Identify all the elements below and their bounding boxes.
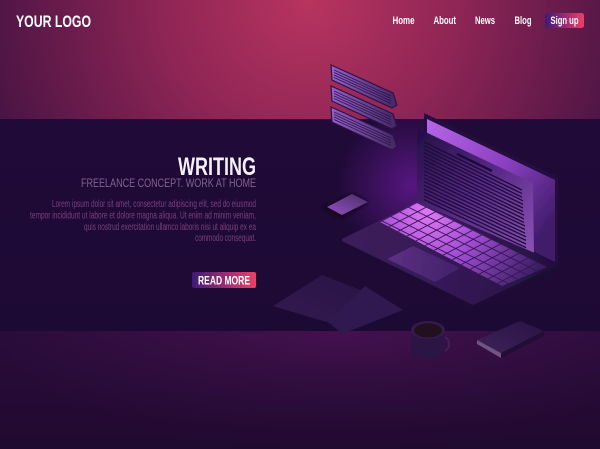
subheading: FREELANCE CONCEPT. WORK AT HOME (81, 176, 256, 190)
bubble 3 (331, 107, 397, 150)
middle background band (0, 119, 600, 331)
sign up button (545, 13, 584, 28)
laptop (342, 113, 558, 307)
bottom table band (0, 331, 600, 449)
sheet 2 (328, 286, 403, 334)
chat bubbles (331, 65, 397, 150)
navigation menu: Home (392, 15, 414, 27)
laptop lid (424, 113, 558, 263)
document sheet (417, 128, 534, 258)
screen glow (337, 110, 487, 260)
navigation menu: About (434, 15, 456, 27)
read more button: READ MORE (198, 276, 250, 288)
notebook (477, 321, 544, 358)
heading: WRITING (178, 153, 256, 181)
body text: commodo consequat. (195, 233, 256, 244)
navigation menu: Blog (514, 15, 532, 27)
smartphone (322, 194, 368, 218)
body text (30, 199, 256, 244)
sheet 1 (273, 275, 368, 323)
sign up button: Sign up (550, 15, 579, 27)
read more button (192, 272, 256, 288)
body text: tempor incididunt ut labore et dolore magna aliqua. Ut enim ad minim veniam, (30, 210, 256, 222)
body text: quis nostrud exercitation ullamco laboris nisi ut aliquip ex ea (84, 222, 256, 233)
papers (273, 275, 403, 334)
logo: YOUR LOGO (16, 12, 91, 31)
navigation menu (392, 15, 532, 27)
coffee mug (411, 321, 449, 358)
laptop base (342, 202, 558, 307)
bubble 2 (331, 86, 397, 129)
keyboard (380, 202, 547, 286)
navigation menu: News (475, 15, 495, 27)
body text: Lorem ipsum dolor sit amet, consectetur adipiscing elit, sed do eiusmod (52, 199, 256, 210)
lit display (427, 119, 555, 262)
trackpad (387, 246, 460, 282)
bubble 1 (331, 65, 397, 108)
top background band (0, 0, 600, 119)
